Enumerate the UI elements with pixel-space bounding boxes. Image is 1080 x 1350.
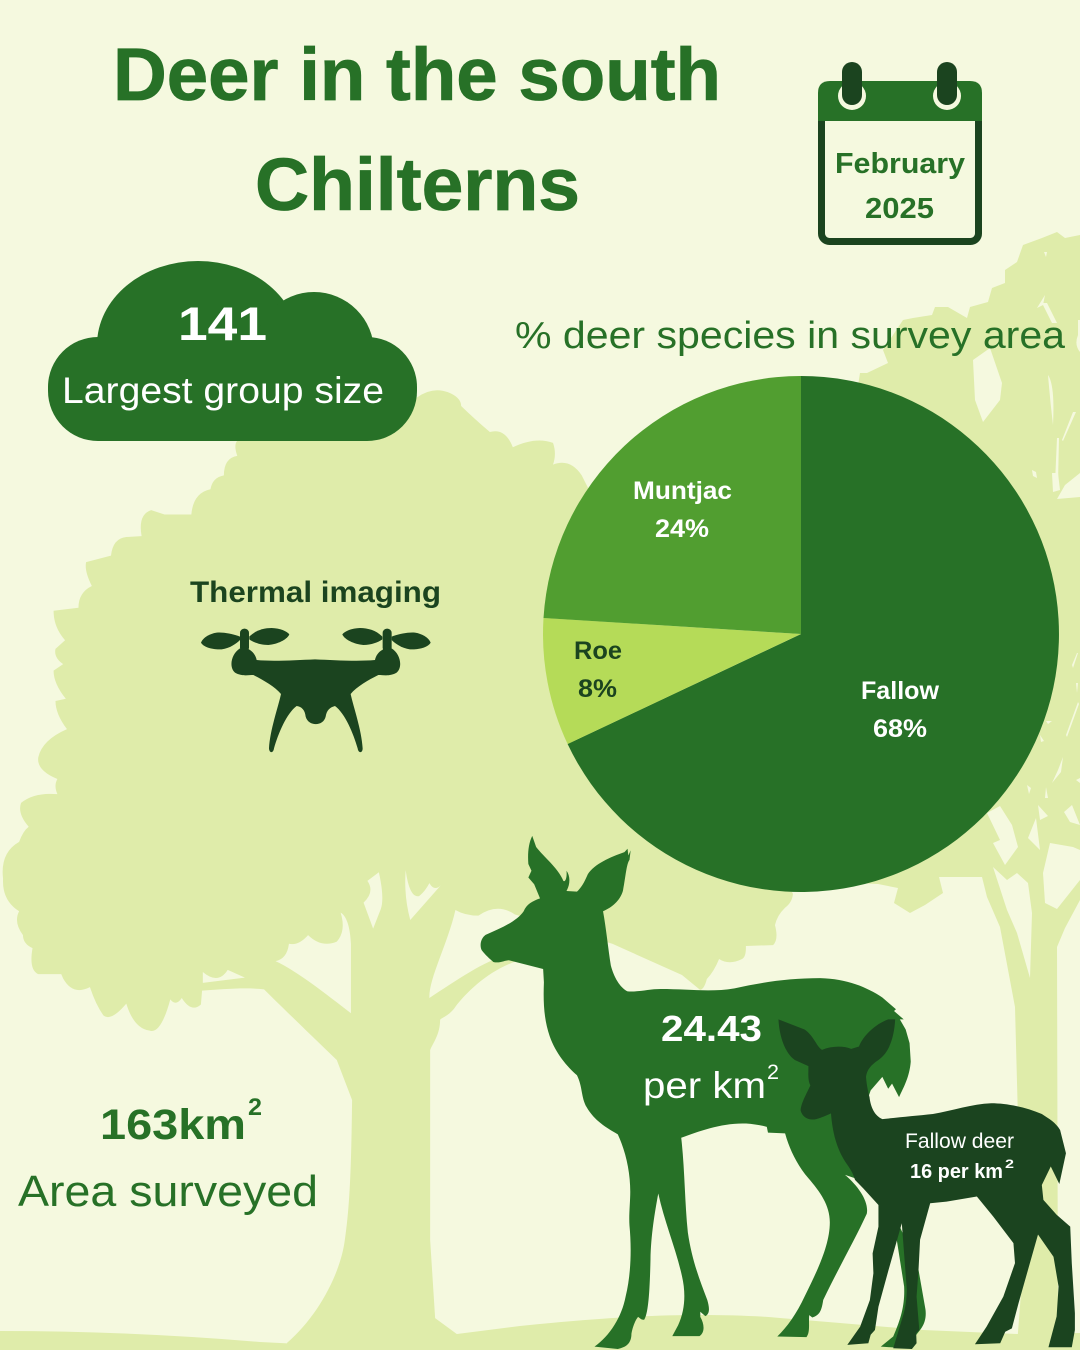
pie chart: deer species bbox=[543, 376, 1059, 892]
slice: fallow 68% bbox=[568, 376, 1059, 892]
background oak tree silhouette bbox=[3, 390, 793, 1350]
area surveyed stat: 163km bbox=[100, 1101, 246, 1149]
slice: muntjac 24%: 24% bbox=[655, 515, 709, 543]
cloud callout: largest group size bbox=[48, 261, 417, 441]
slice: muntjac 24% bbox=[544, 376, 801, 634]
slice: roe 8%: Roe bbox=[574, 637, 622, 665]
fawn silhouette with fallow density: 16 per km bbox=[910, 1161, 1003, 1183]
slice: muntjac 24%: Muntjac bbox=[633, 477, 732, 505]
fawn silhouette with fallow density: 2 bbox=[1005, 1157, 1014, 1171]
cloud callout: largest group size: 141 bbox=[178, 297, 267, 350]
thermal imaging label: Thermal imaging bbox=[190, 576, 441, 609]
background right tree silhouette bbox=[780, 232, 1080, 1345]
slice: fallow 68%: Fallow bbox=[861, 677, 940, 705]
slice: fallow 68%: 68% bbox=[873, 715, 927, 743]
title bbox=[113, 33, 721, 226]
icon: drone bbox=[201, 628, 431, 752]
fawn silhouette with fallow density bbox=[778, 1019, 1075, 1349]
calendar date badge bbox=[818, 62, 982, 242]
calendar date badge: 2025 bbox=[865, 193, 934, 225]
title: Chilterns bbox=[255, 143, 580, 226]
adult deer silhouette with density: 24.43 bbox=[661, 1008, 762, 1049]
area surveyed stat bbox=[18, 1094, 318, 1216]
ground hills bbox=[0, 1315, 1080, 1350]
fawn silhouette with fallow density: Fallow deer bbox=[905, 1130, 1014, 1153]
adult deer silhouette with density: per km bbox=[643, 1065, 766, 1106]
pie chart heading: % deer species in survey area bbox=[515, 315, 1066, 357]
slice: roe 8%: 8% bbox=[578, 675, 617, 703]
title: Deer in the south bbox=[113, 33, 721, 116]
area surveyed stat: Area surveyed bbox=[18, 1167, 318, 1216]
adult deer silhouette with density bbox=[481, 836, 926, 1349]
cloud callout: largest group size: Largest group size bbox=[62, 370, 384, 411]
calendar date badge: February bbox=[835, 148, 965, 180]
slice: roe 8% bbox=[543, 618, 801, 744]
area surveyed stat: 2 bbox=[248, 1094, 262, 1121]
adult deer silhouette with density: 2 bbox=[767, 1061, 779, 1084]
